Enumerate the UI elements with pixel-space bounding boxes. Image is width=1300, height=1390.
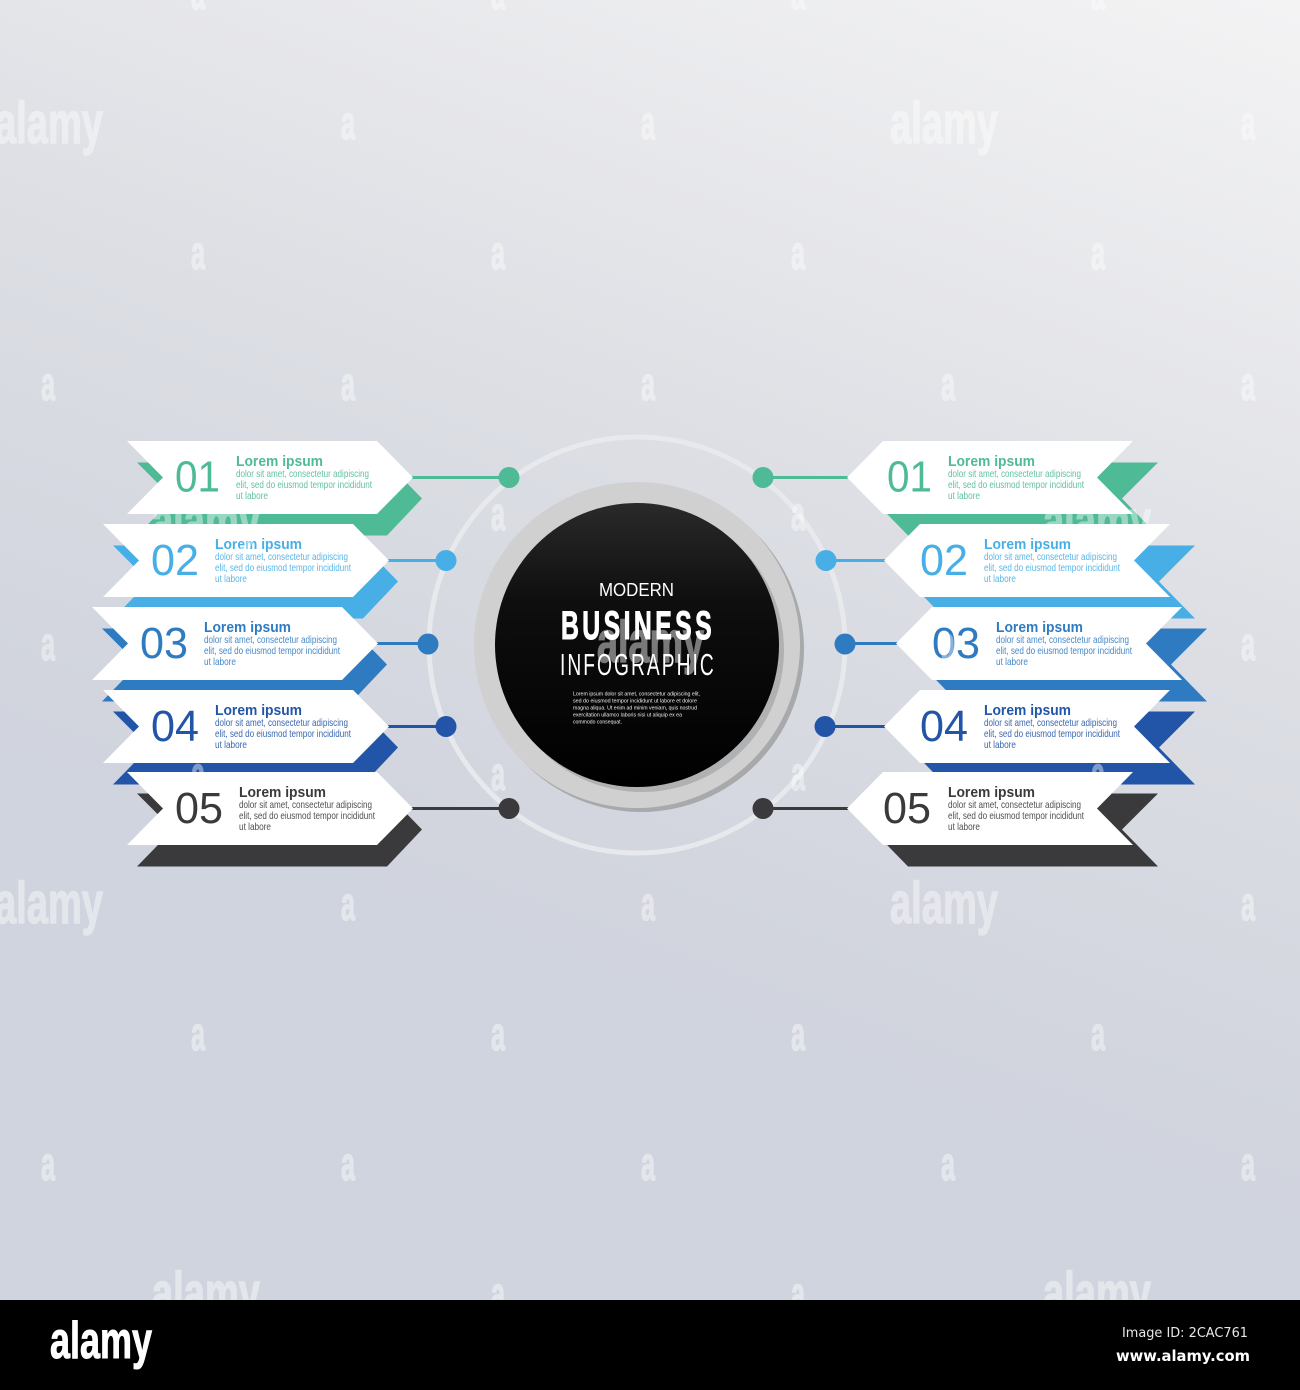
watermarks: a	[941, 1137, 955, 1190]
watermarks: a	[1241, 357, 1255, 410]
panel: right banner 05: dolor sit amet, consectetur adipiscing	[948, 800, 1081, 811]
watermarks: a	[1091, 226, 1105, 279]
watermarks: a	[191, 226, 205, 279]
watermarks: a	[41, 1137, 55, 1190]
watermarks: a	[641, 877, 655, 930]
panel: right banner 02: 02	[920, 536, 968, 585]
panel: left banner 01: elit, sed do eiusmod tempor incididunt	[236, 480, 372, 491]
panel: right banner 03: Lorem ipsum	[996, 620, 1083, 636]
watermarks: a	[491, 1267, 505, 1320]
watermarks: alamy	[1043, 1261, 1151, 1326]
central body text: Lorem ipsum dolor sit amet, consectetur adipiscing elit,	[573, 692, 700, 698]
panel: left banner 01: dolor sit amet, consectetur adipiscing	[236, 469, 369, 480]
connector: right 04	[814, 716, 887, 737]
outer ring	[429, 437, 845, 853]
panel: right banner 04: dolor sit amet, consectetur adipiscing	[984, 718, 1117, 729]
panel: right banner 05	[847, 772, 1158, 866]
central title	[560, 580, 714, 682]
footer bar	[0, 1300, 1300, 1390]
footer bar: Image ID: 2CAC761	[1122, 1325, 1248, 1341]
panel: right banner 01	[847, 441, 1158, 536]
panel: right banner 05: ut labore	[948, 822, 980, 833]
panel: left banner 04: elit, sed do eiusmod tempor incididunt	[215, 729, 351, 740]
panel: right banner 03: elit, sed do eiusmod tempor incididunt	[996, 646, 1132, 657]
panel: right banner 02: elit, sed do eiusmod tempor incididunt	[984, 563, 1120, 574]
watermarks: a	[341, 357, 355, 410]
connector: left 01	[410, 467, 520, 488]
panel: left banner 01: 01	[175, 452, 220, 502]
panel: left banner 03: 03	[140, 619, 188, 668]
panel: left banner 03: elit, sed do eiusmod tempor incididunt	[204, 646, 340, 657]
panel: left banner 01: ut labore	[236, 491, 268, 502]
connector: left 05	[410, 798, 520, 819]
watermarks: a	[491, 487, 505, 540]
panel: left banner 02: elit, sed do eiusmod tempor incididunt	[215, 563, 351, 574]
watermarks: a	[41, 357, 55, 410]
panel: right banner 01: ut labore	[948, 491, 980, 502]
panel: left banner 02: dolor sit amet, consectetur adipiscing	[215, 552, 348, 563]
panel: right banner 02	[884, 524, 1195, 618]
watermarks: a	[191, 1007, 205, 1060]
panel: left banner 03: Lorem ipsum	[204, 620, 291, 636]
watermarks: a	[641, 357, 655, 410]
panel: left banner 05: dolor sit amet, consectetur adipiscing	[239, 800, 372, 811]
connector: left 04	[385, 716, 456, 737]
panel: left banner 01: Lorem ipsum	[236, 454, 323, 470]
panel: left banner 03: ut labore	[204, 657, 236, 668]
panel: right banner 04: 04	[920, 702, 968, 751]
panel: left banner 04: dolor sit amet, consectetur adipiscing	[215, 718, 348, 729]
panel: left banner 02	[103, 524, 398, 618]
panel: left banner 05: Lorem ipsum	[239, 785, 326, 801]
panel: right banner 03: ut labore	[996, 657, 1028, 668]
watermarks: a	[641, 96, 655, 149]
panel: left banner 05: ut labore	[239, 822, 271, 833]
panel: left banner 01	[127, 441, 422, 536]
connector: right 02	[816, 550, 887, 571]
watermarks: a	[1241, 617, 1255, 670]
watermarks: a	[791, 487, 805, 540]
watermarks: alamy	[890, 91, 998, 156]
footer bar: www.alamy.com	[1116, 1347, 1250, 1365]
watermarks: alamy	[152, 489, 260, 554]
watermarks: a	[341, 96, 355, 149]
watermarks: a	[191, 747, 205, 800]
watermarks: alamy	[1043, 489, 1151, 554]
panel: left banner 05: 05	[175, 784, 223, 833]
watermarks: a	[41, 617, 55, 670]
watermarks: a	[1091, 1007, 1105, 1060]
panel: left banner 03: dolor sit amet, consectetur adipiscing	[204, 635, 337, 646]
panel: right banner 02: dolor sit amet, consectetur adipiscing	[984, 552, 1117, 563]
connector: right 05	[752, 798, 850, 819]
footer bar: alamy	[50, 1312, 152, 1370]
watermarks: a	[791, 747, 805, 800]
central body text: commodo consequat.	[573, 720, 622, 726]
panel: right banner 04	[884, 690, 1195, 784]
panel: left banner 05: elit, sed do eiusmod tempor incididunt	[239, 811, 375, 822]
watermarks: a	[1091, 747, 1105, 800]
central title: INFOGRAPHIC	[560, 649, 714, 682]
panel: left banner 02: Lorem ipsum	[215, 537, 302, 553]
watermarks: a	[941, 617, 955, 670]
panel: right banner 03: 03	[932, 619, 980, 668]
watermarks: a	[491, 747, 505, 800]
central body text: sed do eiusmod tempor incididunt ut labore et dolore	[573, 698, 697, 704]
connector: right 01	[752, 467, 850, 488]
panel: right banner 01: dolor sit amet, consectetur adipiscing	[948, 469, 1081, 480]
panel: left banner 02: 02	[151, 536, 199, 585]
panel: right banner 01: Lorem ipsum	[948, 454, 1035, 470]
central title: MODERN	[599, 580, 674, 600]
watermarks: a	[341, 1137, 355, 1190]
connector: left 03	[375, 634, 438, 654]
panel: left banner 04: Lorem ipsum	[215, 703, 302, 719]
panel: right banner 03	[896, 607, 1207, 702]
panel: right banner 04: Lorem ipsum	[984, 703, 1071, 719]
panel: right banner 01: elit, sed do eiusmod tempor incididunt	[948, 480, 1084, 491]
panel: right banner 05: 05	[883, 784, 931, 833]
watermarks: a	[791, 1267, 805, 1320]
panel: left banner 05	[127, 772, 422, 866]
watermarks: a	[1241, 877, 1255, 930]
panel: left banner 04: 04	[151, 702, 199, 751]
panel: right banner 01: 01	[887, 452, 932, 502]
watermarks: a	[1241, 1137, 1255, 1190]
panel: right banner 02: Lorem ipsum	[984, 537, 1071, 553]
panel: left banner 03	[92, 607, 387, 702]
panel: right banner 04: elit, sed do eiusmod tempor incididunt	[984, 729, 1120, 740]
watermarks: a	[941, 357, 955, 410]
watermarks: a	[341, 617, 355, 670]
watermarks: a	[491, 1007, 505, 1060]
panel: right banner 02: ut labore	[984, 574, 1016, 585]
panel: left banner 04: ut labore	[215, 740, 247, 751]
watermarks: alamy	[890, 871, 998, 936]
connector: right 03	[834, 634, 899, 654]
central body text: magna aliqua. Ut enim ad minim veniam, quis nostrud	[573, 706, 697, 712]
panel: right banner 03: dolor sit amet, consectetur adipiscing	[996, 635, 1129, 646]
central body text: exercitation ullamco laboris nisi ut aliquip ex ea	[573, 712, 683, 718]
watermark: centre: alamy	[597, 610, 704, 675]
panel: left banner 02: ut labore	[215, 574, 247, 585]
watermarks: a	[641, 1137, 655, 1190]
central title: BUSINESS	[561, 604, 712, 649]
watermarks: alamy	[152, 1261, 260, 1326]
watermarks: a	[791, 1007, 805, 1060]
watermarks: a	[341, 877, 355, 930]
central circle	[474, 482, 804, 812]
watermarks: a	[491, 226, 505, 279]
central body text	[573, 692, 700, 726]
panel: right banner 05: Lorem ipsum	[948, 785, 1035, 801]
connector: left 02	[385, 550, 456, 571]
panel: left banner 04	[103, 690, 398, 784]
panel: right banner 04: ut labore	[984, 740, 1016, 751]
watermarks: a	[791, 226, 805, 279]
panel: right banner 05: elit, sed do eiusmod tempor incididunt	[948, 811, 1084, 822]
watermarks: a	[1241, 96, 1255, 149]
